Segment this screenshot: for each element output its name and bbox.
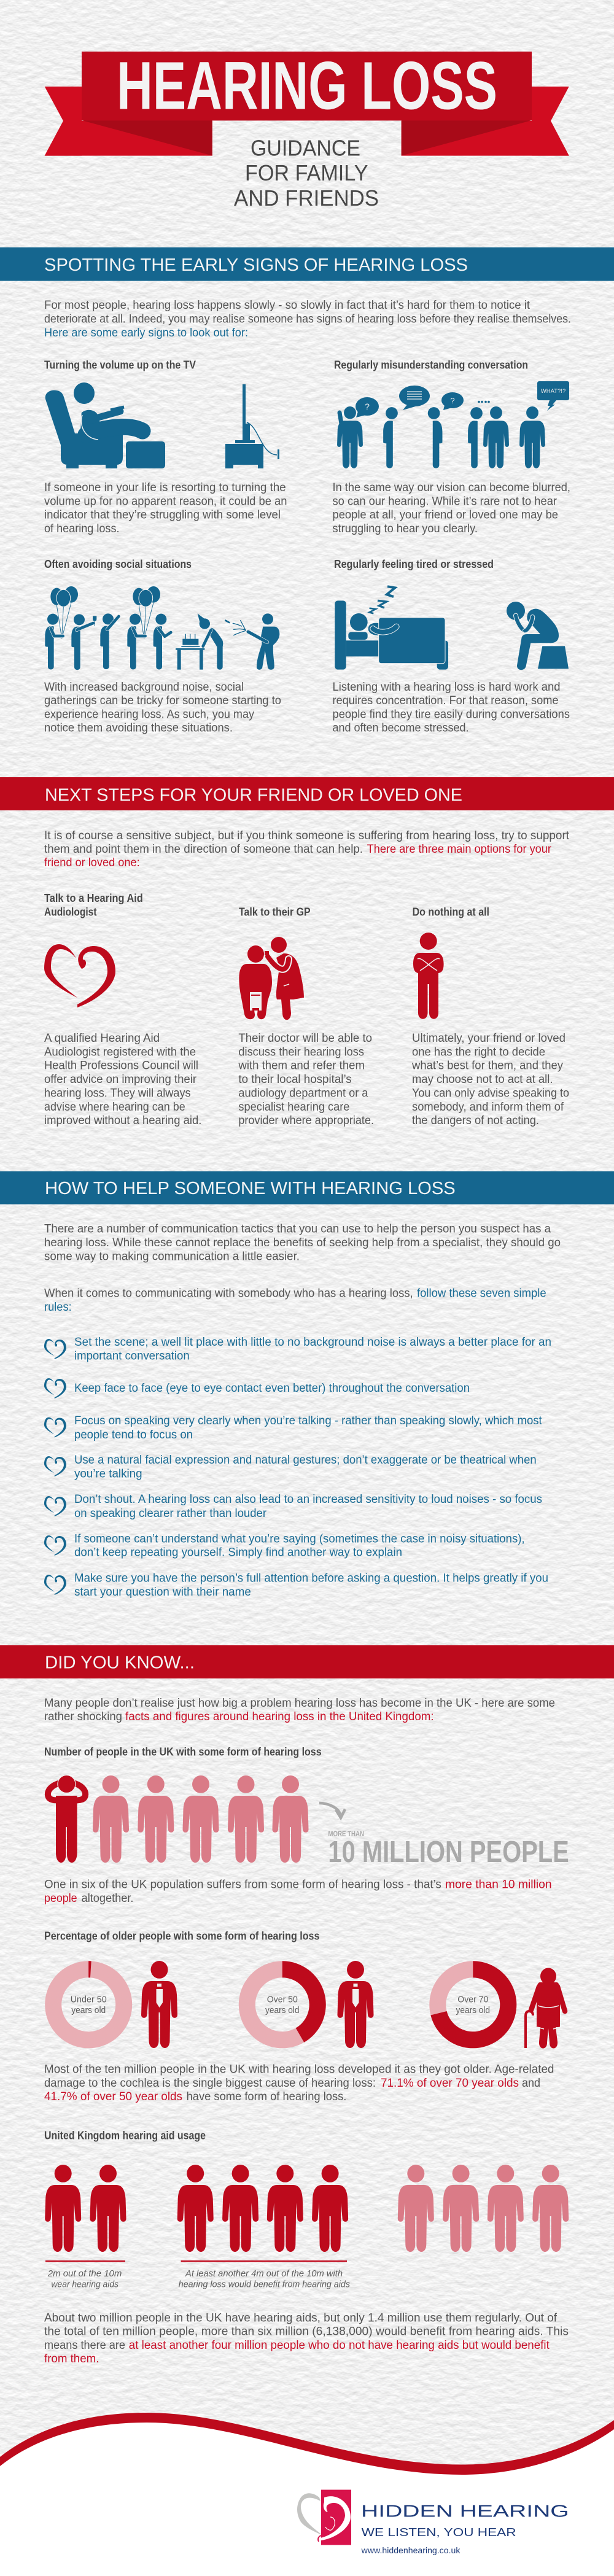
section band: spotting the early signs	[0, 247, 614, 281]
intro text: how to help: When it comes to communicating with somebody who has a hearing loss,	[44, 1287, 413, 1300]
text block: volume up for no apparent reason, it could be an	[44, 495, 287, 508]
intro text: next steps: It is of course a sensitive subject, but if you think someone is suffering from hearing loss, try to support	[44, 829, 570, 842]
panel: number of people with hearing loss	[44, 1745, 569, 1905]
text block: 71.1% of over 70 year olds	[381, 2077, 519, 2090]
text block	[44, 481, 287, 535]
text block: the dangers of not acting.	[412, 1114, 539, 1127]
text block: specialist hearing care	[238, 1101, 349, 1114]
header ribbon	[45, 48, 569, 156]
text block: audiology department or a	[238, 1087, 368, 1100]
heading: Audiologist	[44, 905, 97, 918]
intro text: early signs: deteriorate at all. Indeed, you may realise someone has signs of hearing loss before they realise themselves.	[44, 313, 571, 325]
rule 5: Don’t shout. A hearing loss can also lead to an increased sensitivity to loud noises - so focus	[74, 1493, 542, 1506]
panel: do nothing at all	[411, 905, 569, 1127]
icon: man with tie	[338, 1961, 373, 2048]
text block: improved without a hearing aid.	[44, 1114, 201, 1127]
text block: of hearing loss.	[44, 522, 119, 535]
heading: Regularly misunderstanding conversation	[334, 358, 528, 371]
rule 5	[44, 1493, 542, 1520]
chart: over 70 donut: Over 70	[457, 1995, 488, 2005]
text block: means there are	[44, 2339, 125, 2352]
text block: offer advice on improving their	[44, 1073, 197, 1086]
text block: and often become stressed.	[333, 722, 469, 735]
caption: 2m	[45, 2260, 125, 2290]
arrow	[319, 1803, 345, 1818]
rule 4: you’re talking	[74, 1467, 142, 1481]
section band: spotting the early signs: SPOTTING THE EARLY SIGNS OF HEARING LOSS	[44, 255, 468, 275]
intro text: how to help	[44, 1223, 561, 1314]
chart: under 50 donut: years old	[71, 2006, 106, 2015]
intro text: how to help: follow these seven simple	[417, 1287, 546, 1300]
heading: Talk to their GP	[239, 905, 311, 918]
rule 2	[44, 1378, 470, 1399]
rule 6	[44, 1533, 525, 1559]
text block: Ultimately, your friend or loved	[412, 1032, 565, 1045]
rule 5: on speaking clearer rather than louder	[74, 1507, 267, 1520]
rule 7	[44, 1572, 548, 1599]
caption: 2m: wear hearing aids	[52, 2280, 119, 2290]
rule 4: Use a natural facial expression and natural gestures; don’t exaggerate or be theatrical when	[74, 1454, 537, 1467]
rule 1: Set the scene; a well lit place with little to no background noise is always a better place for an	[74, 1336, 551, 1349]
subtitle: FOR FAMILY	[245, 160, 368, 185]
section band: next steps: NEXT STEPS FOR YOUR FRIEND OR LOVED ONE	[45, 785, 462, 805]
logo: Hidden Hearing	[297, 2490, 569, 2555]
text block	[44, 2311, 569, 2365]
text block	[333, 481, 570, 535]
intro text: how to help: There are a number of communication tactics that you can use to help the person you suspect has a	[44, 1223, 551, 1235]
rule 6: If someone can’t understand what you’re saying (sometimes the case in noisy situations),	[74, 1533, 525, 1546]
text block: people	[44, 1892, 77, 1905]
icon: person in armchair	[45, 382, 165, 468]
heading: Do nothing at all	[413, 905, 489, 918]
text block: advise where hearing can be	[44, 1101, 185, 1114]
text block: discuss their hearing loss	[238, 1046, 364, 1058]
icon: group of people misunderstanding: ?	[450, 396, 455, 405]
chart: over 50 donut: years old	[265, 2006, 300, 2015]
text block: requires concentration. For that reason, some	[333, 694, 559, 707]
chart: over 50 donut	[239, 1961, 326, 2048]
intro text: did you know: Many people don’t realise just how big a problem hearing loss has become in the UK - here are some	[44, 1697, 555, 1710]
heading: Talk to a Hearing Aid	[44, 891, 143, 904]
rule 3: people tend to focus on	[74, 1429, 193, 1441]
intro text: did you know: rather shocking	[44, 1710, 122, 1723]
text block	[44, 2063, 554, 2103]
text block: You can only advise speaking to	[412, 1087, 569, 1100]
text block: experience hearing loss. As such, you may	[44, 708, 254, 721]
subtitle: GUIDANCE	[251, 136, 360, 161]
text block: to their local hospital’s	[238, 1073, 352, 1086]
intro text: did you know	[44, 1697, 555, 1723]
panel: regularly misunderstanding conversation	[333, 358, 570, 535]
text block: Health Professions Council will	[44, 1060, 198, 1073]
panel: talk to their GP	[238, 905, 374, 1127]
icon: 2 people wearing hearing aids	[45, 2165, 126, 2252]
caption: 4m: hearing loss would benefit from hearing aids	[179, 2280, 350, 2290]
text block: Listening with a hearing loss is hard work and	[333, 681, 560, 694]
text block: more than 10 million	[445, 1879, 552, 1891]
icon: logo heart	[297, 2490, 351, 2545]
icon: sleeping in bed and stressed man	[335, 586, 569, 670]
text block: One in six of the UK population suffers from some form of hearing loss - that’s	[44, 1879, 441, 1891]
heading: Often avoiding social situations	[44, 557, 192, 570]
text block: from them.	[44, 2353, 99, 2365]
text block	[333, 681, 570, 735]
panel: percentage of older people	[44, 1930, 565, 2103]
brand text	[361, 2501, 569, 2555]
panel: often avoiding social situations	[44, 557, 281, 735]
rule 3: Focus on speaking very clearly when you’re talking - rather than speaking slowly, which most	[74, 1414, 542, 1427]
text block	[411, 1032, 569, 1127]
rule 6: don’t keep repeating yourself. Simply find another way to explain	[74, 1546, 402, 1559]
chart: over 70 donut: years old	[456, 2006, 490, 2015]
intro text: next steps: There are three main options for your	[367, 843, 552, 856]
caption: 4m	[179, 2260, 350, 2290]
icon: person with crossed arms	[413, 933, 444, 1019]
subtitle: AND FRIENDS	[234, 185, 379, 211]
text block: Most of the ten million people in the UK with hearing loss developed it as they got older. Age-related	[44, 2063, 554, 2076]
text block	[44, 1879, 552, 1905]
section band: next steps	[0, 777, 614, 810]
footer wave	[0, 2413, 614, 2576]
icon: group of people misunderstanding: ?	[365, 402, 370, 411]
text block: so can our hearing. While it’s rare not to hear	[333, 495, 558, 508]
text block: gatherings can be tricky for someone starting to	[44, 694, 281, 707]
panel: talk to a hearing aid audiologist	[44, 891, 201, 1127]
rule list	[44, 1336, 551, 1599]
subtitle	[234, 136, 379, 211]
text block: may choose not to act at all.	[412, 1073, 553, 1086]
panel: regularly feeling tired or stressed	[333, 557, 570, 735]
rule 1: important conversation	[74, 1350, 190, 1363]
icon: 4 remaining people	[398, 2165, 569, 2252]
chart: under 50 donut: Under 50	[71, 1995, 107, 2005]
intro text: early signs	[44, 299, 571, 339]
text block	[44, 1032, 201, 1127]
text block: provider where appropriate.	[238, 1114, 374, 1127]
heading: United Kingdom hearing aid usage	[44, 2129, 206, 2142]
icon: doctor and patient	[239, 937, 304, 1020]
rule 3	[44, 1414, 542, 1441]
icon: red person holding head	[48, 1775, 85, 1863]
intro text: next steps: friend or loved one:	[44, 856, 140, 869]
brand text: WE LISTEN, YOU HEAR	[362, 2526, 516, 2539]
text block: have some form of hearing loss.	[187, 2090, 346, 2103]
text block: one has the right to decide	[412, 1046, 545, 1058]
text block: Their doctor will be able to	[238, 1032, 372, 1045]
icon: television	[225, 384, 279, 468]
text block: at least another four million people who do not have hearing aids but would benefit	[129, 2339, 550, 2352]
icon: man with tie	[141, 1961, 177, 2048]
caption: 2m: 2m out of the 10m	[47, 2269, 122, 2279]
heading	[44, 891, 143, 918]
text block	[238, 1032, 374, 1127]
text block: the total of ten million people, more than six million (6,138,000) would benefit from hearing aids. This	[44, 2326, 569, 2338]
section band: how to help	[0, 1171, 614, 1205]
intro text: how to help: some way to making communication a little easier.	[44, 1250, 300, 1263]
intro text: how to help: hearing loss. While these cannot replace the benefits of seeking help from a specialist, they should go	[44, 1236, 561, 1249]
section band: did you know	[0, 1645, 614, 1678]
text block: somebody, and inform them of	[412, 1101, 564, 1114]
text block: people at all, your friend or loved one may be	[333, 509, 558, 522]
text block: indicator that they’re struggling with some level	[44, 509, 281, 522]
intro text: how to help: rules:	[44, 1301, 72, 1314]
section band: did you know: DID YOU KNOW...	[45, 1653, 195, 1673]
rule 4	[44, 1454, 537, 1481]
text block: with them and refer them	[238, 1060, 365, 1073]
brand text: HIDDEN HEARING	[361, 2501, 569, 2520]
text block: and	[522, 2077, 540, 2090]
intro text: early signs: For most people, hearing loss happens slowly - so slowly in fact that it’s hard for them to notice it	[44, 299, 530, 312]
section band: how to help: HOW TO HELP SOMEONE WITH HEARING LOSS	[45, 1179, 456, 1198]
chart: over 50 donut: Over 50	[267, 1995, 298, 2005]
heading: Number of people in the UK with some form of hearing loss	[44, 1745, 322, 1758]
text block: what’s best for them, and they	[411, 1060, 563, 1073]
icon: old man with cane	[526, 1968, 565, 2048]
chart: over 70 donut	[429, 1961, 516, 2048]
heading: Turning the volume up on the TV	[44, 358, 196, 371]
text block	[44, 681, 281, 735]
text block: About two million people in the UK have hearing aids, but only 1.4 million use them regularly. Out of	[44, 2311, 558, 2324]
text block: A qualified Hearing Aid	[44, 1032, 160, 1045]
heading: Percentage of older people with some form of hearing loss	[44, 1930, 319, 1942]
text block: With increased background noise, social	[44, 681, 244, 694]
chart: under 50 donut	[45, 1961, 132, 2048]
rule 7: start your question with their name	[74, 1586, 251, 1599]
text block: struggling to hear you clearly.	[333, 522, 478, 535]
icon: heart	[44, 944, 115, 1007]
rule 7: Make sure you have the person’s full attention before asking a question. It helps greatly if you	[74, 1572, 548, 1585]
text block: In the same way our vision can become blurred,	[333, 481, 570, 494]
text block: notice them avoiding these situations.	[44, 722, 233, 735]
text block: hearing loss. They will always	[44, 1087, 191, 1100]
intro text: early signs: Here are some early signs to look out for:	[44, 327, 248, 339]
panel: turning the volume up	[44, 358, 287, 535]
text block: damage to the cochlea is the single biggest cause of hearing loss:	[44, 2077, 376, 2090]
icon: 4 people who would benefit	[177, 2165, 348, 2252]
intro text: did you know: facts and figures around hearing loss in the United Kingdom:	[125, 1710, 434, 1723]
intro text: next steps: them and point them in the direction of someone that can help.	[44, 843, 363, 856]
rule 2: Keep face to face (eye to eye contact even better) throughout the conversation	[74, 1382, 470, 1395]
rule 1	[44, 1336, 551, 1363]
text block: people find they tire easily during conversations	[333, 708, 570, 721]
text block: Audiologist registered with the	[44, 1046, 196, 1058]
icon: party scene	[45, 586, 279, 670]
callout: 10 million people: MORE THAN	[328, 1831, 364, 1838]
text block: If someone in your life is resorting to turning the	[44, 481, 286, 494]
heading: Regularly feeling tired or stressed	[334, 557, 494, 570]
icon: group of people misunderstanding: WHAT?!?	[541, 388, 565, 395]
intro text: next steps	[44, 829, 570, 869]
icon: group of people misunderstanding	[337, 381, 569, 468]
icon: pink people row	[93, 1775, 308, 1863]
text block: altogether.	[82, 1892, 134, 1905]
caption: 4m: At least another 4m out of the 10m with	[185, 2269, 343, 2279]
brand text: www.hiddenhearing.co.uk	[361, 2545, 460, 2555]
text block: 41.7% of over 50 year olds	[44, 2090, 182, 2103]
panel: hearing aid usage	[44, 2129, 569, 2365]
